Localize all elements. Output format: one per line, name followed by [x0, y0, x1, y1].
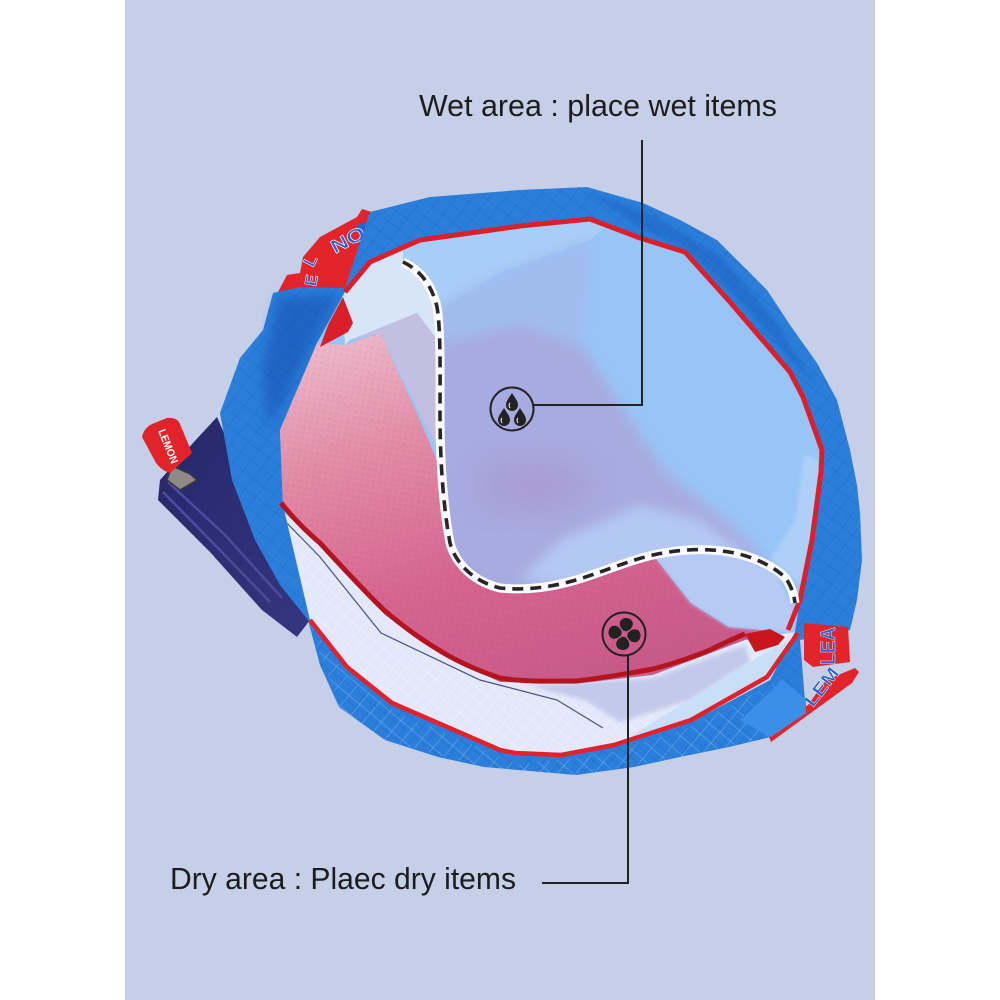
pale top sheet — [403, 222, 604, 308]
callout: dry area — [170, 612, 646, 896]
red strap with LEM lettering: LEM — [800, 663, 843, 710]
red zipper tag: LEMON — [155, 428, 180, 466]
dark red inner seam — [281, 503, 745, 681]
zipper pull — [167, 466, 197, 490]
purple bloom — [488, 460, 580, 510]
lower pocket — [281, 510, 795, 755]
lavender fold, left of seam — [351, 313, 436, 445]
red zipper tag — [142, 418, 192, 473]
red strap loop, top left — [278, 209, 375, 292]
red strap tab with LEA lettering: LEA — [817, 627, 840, 665]
blue bag rim — [220, 187, 862, 775]
icon: water drops — [490, 388, 534, 430]
blue bag corner flap — [740, 680, 806, 737]
callout: wet area — [419, 88, 777, 430]
background panel — [125, 0, 875, 1000]
red strap with LEM lettering — [769, 663, 859, 742]
red strap loop, top left: NO — [327, 223, 369, 258]
dry compartment pink panel — [280, 333, 783, 684]
wet compartment layers — [395, 215, 822, 590]
wet compartment base — [280, 228, 820, 715]
icon: fan — [602, 612, 646, 656]
red strap loop, top left: L — [300, 252, 321, 270]
red strap loop, top left: E — [301, 273, 322, 288]
red trim, upper rim — [345, 219, 822, 630]
wet area label: Wet area : place wet items — [419, 88, 777, 123]
lavender central sheet — [430, 325, 775, 590]
dashed stitched seam — [403, 262, 795, 603]
light wash near seam — [524, 503, 743, 584]
pale lobe above pink — [653, 552, 796, 632]
dry area leader line — [542, 656, 628, 883]
red trim, lower rim — [310, 620, 798, 755]
bag opening interior — [280, 222, 820, 753]
dry area label: Dry area : Plaec dry items — [170, 861, 516, 896]
red strap tab with LEA lettering — [804, 623, 850, 667]
lighter strip at right edge — [771, 456, 819, 584]
red corner gusset, lower right — [745, 629, 785, 652]
wet area leader line — [534, 140, 642, 405]
red tab, top left inside — [320, 297, 353, 347]
pale lining, top left — [342, 250, 445, 345]
blue-lavender upper sheet — [441, 246, 576, 343]
navy zip pocket — [158, 417, 310, 637]
infographic canvas — [125, 0, 875, 1000]
illustration: wet and dry drawstring bag — [142, 187, 862, 775]
